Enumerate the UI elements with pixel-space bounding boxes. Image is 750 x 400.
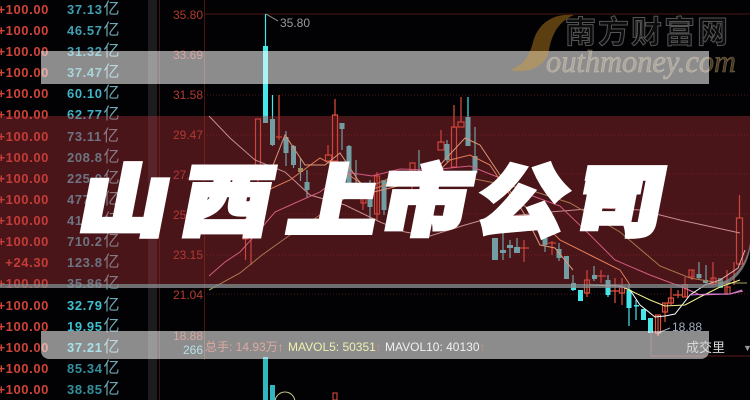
price axis labels: 27.37 [173,168,203,182]
volume legend: MAVOL5: 50351↑ [288,340,382,354]
panel gray edge [0,243,750,288]
turnover column: 35.86亿 [67,274,120,292]
price axis labels: 266 [183,343,203,357]
volume bars [263,357,337,400]
low price marker: 18.88 [672,320,702,334]
turnover column: 37.13亿 [67,0,120,18]
turnover column: 41.25亿 [67,211,120,229]
turnover column: 477.3亿 [67,190,120,208]
price axis labels: 23.15 [173,248,203,262]
turnover column: 208.8亿 [67,148,120,166]
volume frame [651,331,750,356]
turnover column: 31.32亿 [67,42,120,60]
volume legend: 总手: 14.93万↑ [205,340,284,354]
turnover column: 225.0亿 [67,169,120,187]
up candles [243,95,742,336]
percent change column [0,2,49,397]
turnover column: 46.57亿 [67,21,120,39]
turnover column [67,0,120,398]
volume legend [205,340,750,355]
logo url: outhmoney.com [546,43,736,79]
price axis labels: 35.80 [173,8,203,22]
turnover column: 37.21亿 [67,338,120,356]
title: 山西上市公司 [71,141,677,252]
turnover column: 123.8亿 [67,253,120,271]
top gray band [41,51,709,84]
bottom gray band [41,331,709,359]
turnover column: 85.34亿 [67,359,120,377]
turnover column: 32.79亿 [67,296,120,314]
volume legend: 成交里 [686,340,725,355]
price axis labels: 33.69 [173,48,203,62]
price axis labels [173,8,203,357]
price axis labels: 31.58 [173,88,203,102]
volume legend: MAVOL10: 40130↑ [385,340,486,354]
price axis labels: 18.88 [173,329,203,343]
turnover column: 37.47亿 [67,63,120,81]
price axis labels: 29.47 [173,128,203,142]
turnover column: 19.95亿 [67,317,120,335]
price axis labels: 21.04 [173,288,203,302]
watermark: southmoney wordmark [546,15,736,79]
red title panel [0,116,750,284]
high price marker: 35.80 [280,16,310,30]
logo chinese name: 南方财富网 [565,15,730,50]
low price marker [658,320,702,334]
turnover column: 73.11亿 [67,127,119,145]
moving average lines [209,116,747,317]
percent change column: +24.30 [5,255,49,270]
high price marker [266,14,310,30]
turnover column: 38.85亿 [67,380,120,398]
down candles [266,14,706,326]
price axis labels: 25.26 [173,208,203,222]
turnover column: 62.77亿 [67,105,120,123]
turnover column: 60.10亿 [67,84,120,102]
turnover column: 710.2亿 [67,232,120,250]
logo swoosh [510,15,574,71]
candlestick chart [209,14,747,336]
